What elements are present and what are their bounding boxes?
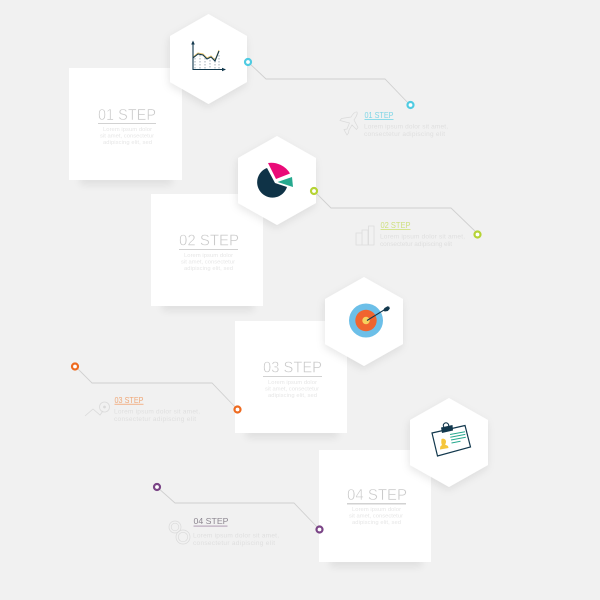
icon: line chart — [191, 40, 226, 71]
heading: 03 STEP: 03 STEP — [263, 360, 322, 376]
text block: card 3 body: adipiscing elit, sed — [268, 393, 317, 399]
text block: card 2 body: Lorem ipsum dolor — [184, 253, 233, 259]
text block: card 2 body: sit amet, consectetur — [181, 260, 235, 266]
text block: step 2 description: consectetur adipiscing elit — [380, 241, 452, 248]
text block: card 3 body: Lorem ipsum dolor — [268, 380, 317, 386]
panel: step 3 card — [235, 321, 347, 438]
hexagon 2 with pie chart icon — [238, 136, 316, 225]
label: 04 STEP: 04 STEP — [194, 516, 229, 526]
connector: step 2 — [311, 188, 480, 238]
text block: step 3 description: consectetur adipiscing elit — [114, 416, 196, 423]
text block: card 4 body: sit amet, consectetur — [349, 514, 403, 520]
text block: step 3 description: Lorem ipsum dolor sit amet, — [114, 408, 200, 416]
hexagon 1 with line chart icon — [170, 14, 247, 104]
heading: 04 STEP: 04 STEP — [347, 487, 407, 504]
text block: step 4 description: consectetur adipiscing elit — [193, 540, 275, 547]
label: 03 STEP: 03 STEP — [114, 395, 144, 405]
text block: step 1 description: consectetur adipiscing elit — [364, 131, 445, 138]
icon: bar chart — [356, 226, 374, 245]
heading: 01 STEP: 01 STEP — [98, 107, 156, 124]
text block: step 4 description: Lorem ipsum dolor sit amet, — [193, 532, 279, 540]
caption: step 3 — [85, 395, 200, 423]
label: 01 STEP: 01 STEP — [364, 110, 394, 120]
connector: step 4 — [154, 484, 322, 532]
icon: gears — [169, 521, 190, 544]
text block: card 2 body: adipiscing elit, sed — [184, 266, 233, 272]
panel: step 2 card — [151, 194, 263, 311]
caption: step 1 — [340, 110, 448, 138]
icon: airplane — [340, 112, 358, 135]
hexagon 3 with target icon — [325, 277, 403, 366]
text block: card 3 body: sit amet, consectetur — [265, 386, 319, 392]
text block: card 1 body: Lorem ipsum dolor — [103, 127, 152, 133]
label: 02 STEP: 02 STEP — [380, 220, 411, 230]
text block: card 1 body: adipiscing elit, sed — [103, 140, 152, 146]
icon: target with dart — [349, 304, 390, 338]
text block: card 1 body: sit amet, consectetur — [100, 134, 154, 140]
text block: card 4 body: Lorem ipsum dolor — [352, 507, 401, 513]
caption: step 2 — [356, 220, 465, 248]
caption: step 4 — [169, 516, 279, 547]
connector: step 3 — [72, 364, 240, 412]
icon: pie chart — [257, 163, 293, 198]
text block: step 2 description: Lorem ipsum dolor sit amet, — [380, 234, 465, 240]
text block: step 1 description: Lorem ipsum dolor sit amet, — [364, 124, 448, 130]
hexagon 4 with ID badge icon — [410, 398, 488, 487]
panel: step 1 card — [69, 68, 182, 185]
panel: step 4 card — [319, 450, 431, 567]
text block: card 4 body: adipiscing elit, sed — [352, 520, 401, 526]
connector: step 1 — [245, 59, 414, 108]
icon: route with pin — [85, 402, 110, 416]
icon: ID badge — [432, 423, 470, 456]
heading: 02 STEP: 02 STEP — [179, 232, 239, 250]
